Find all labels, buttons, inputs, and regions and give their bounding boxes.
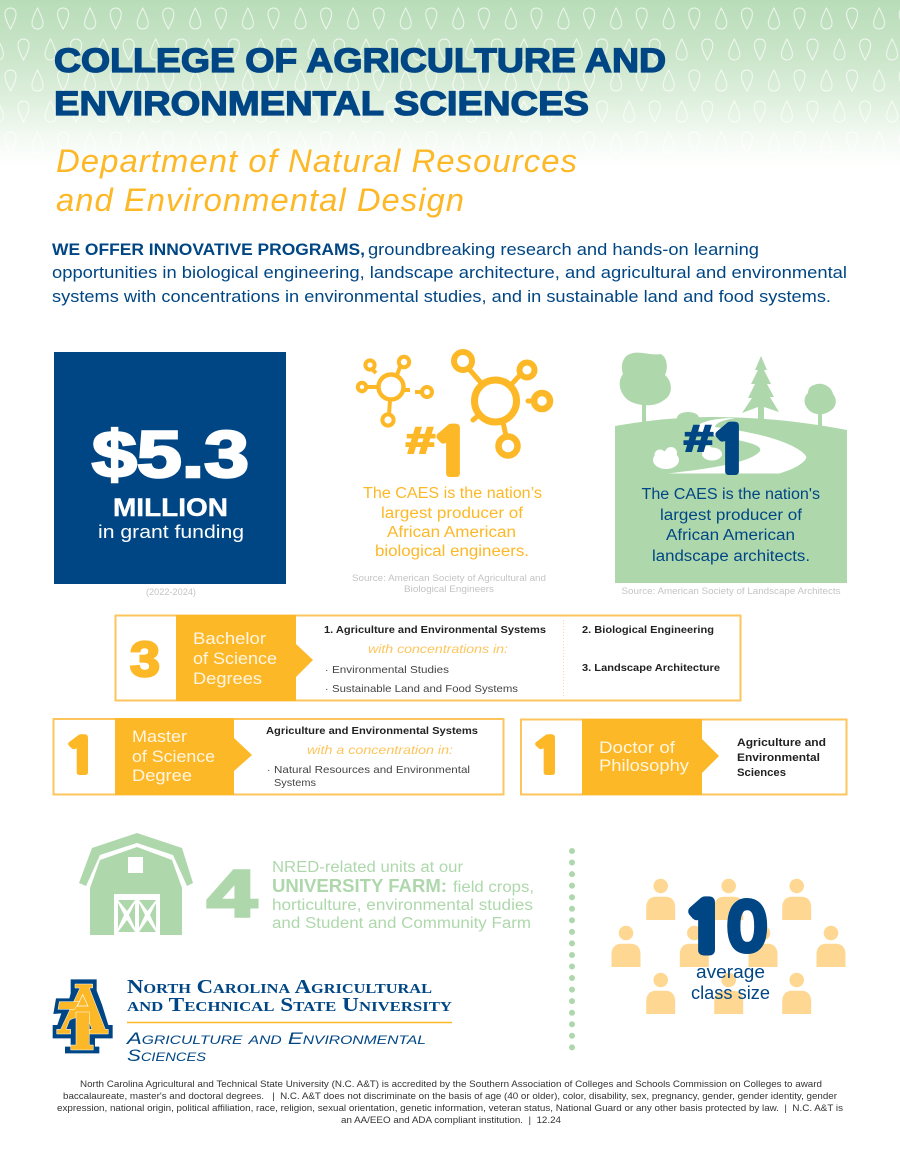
icon: class of people xyxy=(612,879,846,1014)
intro paragraph: opportunities in biological engineering, landscape architecture, and agricultural and environmental xyxy=(52,263,847,282)
university farm text: NRED-related units at our xyxy=(272,859,463,876)
number one ranking xyxy=(406,420,472,484)
biological engineers text: African American xyxy=(387,524,516,541)
doctoral program: Environmental xyxy=(737,752,820,764)
doctoral gold arrow block xyxy=(582,719,719,795)
panel: doctoral degree xyxy=(521,719,846,795)
icon: small molecule xyxy=(358,357,432,426)
panel: grant funding xyxy=(54,352,286,584)
logo: university emblem xyxy=(53,979,113,1053)
bachelor program one xyxy=(324,624,546,695)
intro paragraph: WE OFFER INNOVATIVE PROGRAMS, xyxy=(52,240,365,259)
biological engineers text xyxy=(363,485,542,560)
university farm count: 4 xyxy=(207,856,257,930)
class size caption xyxy=(691,962,770,1003)
grant caption: in grant funding xyxy=(98,522,244,542)
panel: landscape architects xyxy=(615,353,847,597)
landscape architects text: landscape architects. xyxy=(652,548,810,565)
logo: college name xyxy=(126,1029,426,1065)
panel: master degree xyxy=(54,718,504,795)
landscape architects source: Source: American Society of Landscape Architects xyxy=(622,586,841,597)
number one ranking: # xyxy=(684,418,713,459)
master program: · xyxy=(267,764,270,776)
bachelor label: of Science xyxy=(193,649,277,668)
department subtitle: and Environmental Design xyxy=(56,182,465,218)
bachelor gold arrow block xyxy=(176,615,313,701)
department subtitle xyxy=(56,143,578,218)
bachelor label: Degrees xyxy=(193,669,262,688)
landscape architects text xyxy=(642,486,820,565)
university farm text: and Student and Community Farm xyxy=(272,915,531,932)
icon: white river xyxy=(668,418,806,474)
footer disclaimer: baccalaureate, master's and doctoral degrees. | N.C. A&T does not discriminate on the basis of age (40 or older), color, disability, sex, pregnancy, gender, gender identity, gender xyxy=(63,1091,837,1102)
class size caption: average xyxy=(696,962,765,982)
logo: university name: North Carolina Agricultural xyxy=(127,977,432,998)
master label: Master xyxy=(132,727,187,746)
biological engineers text: biological engineers. xyxy=(375,543,529,560)
footer disclaimer xyxy=(57,1079,843,1126)
grant unit: MILLION xyxy=(113,494,228,522)
icon: bushes xyxy=(653,446,722,469)
bachelor count: 3 xyxy=(130,633,160,687)
university farm text: UNIVERSITY FARM: xyxy=(272,875,447,896)
title: ENVIRONMENTAL SCIENCES xyxy=(54,85,589,123)
footer disclaimer: North Carolina Agricultural and Technical State University (N.C. A&T) is accredited by the Southern Association of Colleges and Schools Commission on Colleges to award xyxy=(80,1079,822,1090)
grant date range: (2022-2024) xyxy=(146,587,196,598)
footer disclaimer: expression, national origin, political affiliation, race, religion, sexual orientation, genetic information, veteran status, National Guard or any other basis protected by law. | N.C. A&T is xyxy=(57,1103,843,1114)
master program: Natural Resources and Environmental xyxy=(274,764,470,776)
master gold arrow block xyxy=(115,718,252,795)
doctoral label: Philosophy xyxy=(599,756,690,775)
master label xyxy=(132,727,215,785)
master program: with a concentration in: xyxy=(307,745,453,757)
logo: university name: and Technical State University xyxy=(127,995,452,1016)
university farm text: field crops, xyxy=(453,879,534,896)
intro paragraph: systems with concentrations in environmental studies, and in sustainable land and food systems. xyxy=(52,287,831,306)
logo: university name xyxy=(127,977,452,1016)
title: COLLEGE OF AGRICULTURE AND xyxy=(54,42,666,80)
class size caption: class size xyxy=(691,983,770,1003)
landscape architects text: largest producer of xyxy=(660,507,803,524)
icon: trees xyxy=(620,353,836,428)
number one ranking xyxy=(684,418,751,482)
number one ranking: # xyxy=(406,420,435,461)
landscape architects text: The CAES is the nation's xyxy=(642,486,820,503)
doctoral label xyxy=(599,738,690,775)
biological engineers source: Source: American Society of Agricultural and xyxy=(352,573,546,584)
bachelor label: Bachelor xyxy=(193,629,266,648)
master label: Degree xyxy=(132,766,192,785)
panel: bachelor degrees xyxy=(116,615,740,701)
logo: college name: Sciences xyxy=(127,1046,206,1065)
department subtitle: Department of Natural Resources xyxy=(56,143,578,179)
bachelor program one: · xyxy=(325,664,328,676)
master count: 1 xyxy=(63,734,99,781)
logo: college name: Agriculture and Environmental xyxy=(126,1029,426,1048)
icon: green hill xyxy=(615,417,847,583)
number one ranking: 1 xyxy=(710,421,751,482)
biological engineers source xyxy=(352,573,546,595)
doctoral count: 1 xyxy=(530,734,566,781)
master program: Systems xyxy=(274,777,316,789)
panel: biological engineers xyxy=(352,352,550,595)
bachelor programs two and three: 3. Landscape Architecture xyxy=(582,662,720,674)
biological engineers source: Biological Engineers xyxy=(404,584,494,595)
doctoral label: Doctor of xyxy=(599,738,675,757)
icon: large molecule xyxy=(454,352,550,456)
bachelor program one: with concentrations in: xyxy=(368,644,508,656)
bachelor programs two and three: 2. Biological Engineering xyxy=(582,624,714,636)
number one ranking: 1 xyxy=(431,423,472,484)
university farm text xyxy=(272,859,534,932)
class size number: 10 xyxy=(684,895,768,961)
master label: of Science xyxy=(132,747,215,766)
footer disclaimer: an AA/EEO and ADA compliant institution. | 12.24 xyxy=(341,1115,561,1126)
intro paragraph xyxy=(52,240,847,306)
master program xyxy=(266,725,478,789)
doctoral program: Sciences xyxy=(737,767,786,779)
bachelor program one: Sustainable Land and Food Systems xyxy=(332,683,518,695)
biological engineers text: The CAES is the nation’s xyxy=(363,485,542,502)
university farm text: horticulture, environmental studies xyxy=(272,897,533,914)
biological engineers text: largest producer of xyxy=(381,505,524,522)
intro paragraph: groundbreaking research and hands-on learning xyxy=(368,240,759,259)
bachelor program one: Environmental Studies xyxy=(332,664,449,676)
bachelor program one: 1. Agriculture and Environmental Systems xyxy=(324,624,546,636)
doctoral program: Agriculture and xyxy=(737,737,826,749)
header background with droplet pattern xyxy=(0,0,900,168)
bachelor programs two and three xyxy=(582,624,720,674)
doctoral program xyxy=(737,737,826,779)
master program: Agriculture and Environmental Systems xyxy=(266,725,478,737)
bachelor program one: · xyxy=(325,683,328,695)
grant amount: $5.3 xyxy=(92,417,249,491)
landscape architects text: African American xyxy=(666,527,795,544)
icon: barn xyxy=(79,833,193,935)
bachelor label xyxy=(193,629,277,688)
title xyxy=(54,42,666,123)
